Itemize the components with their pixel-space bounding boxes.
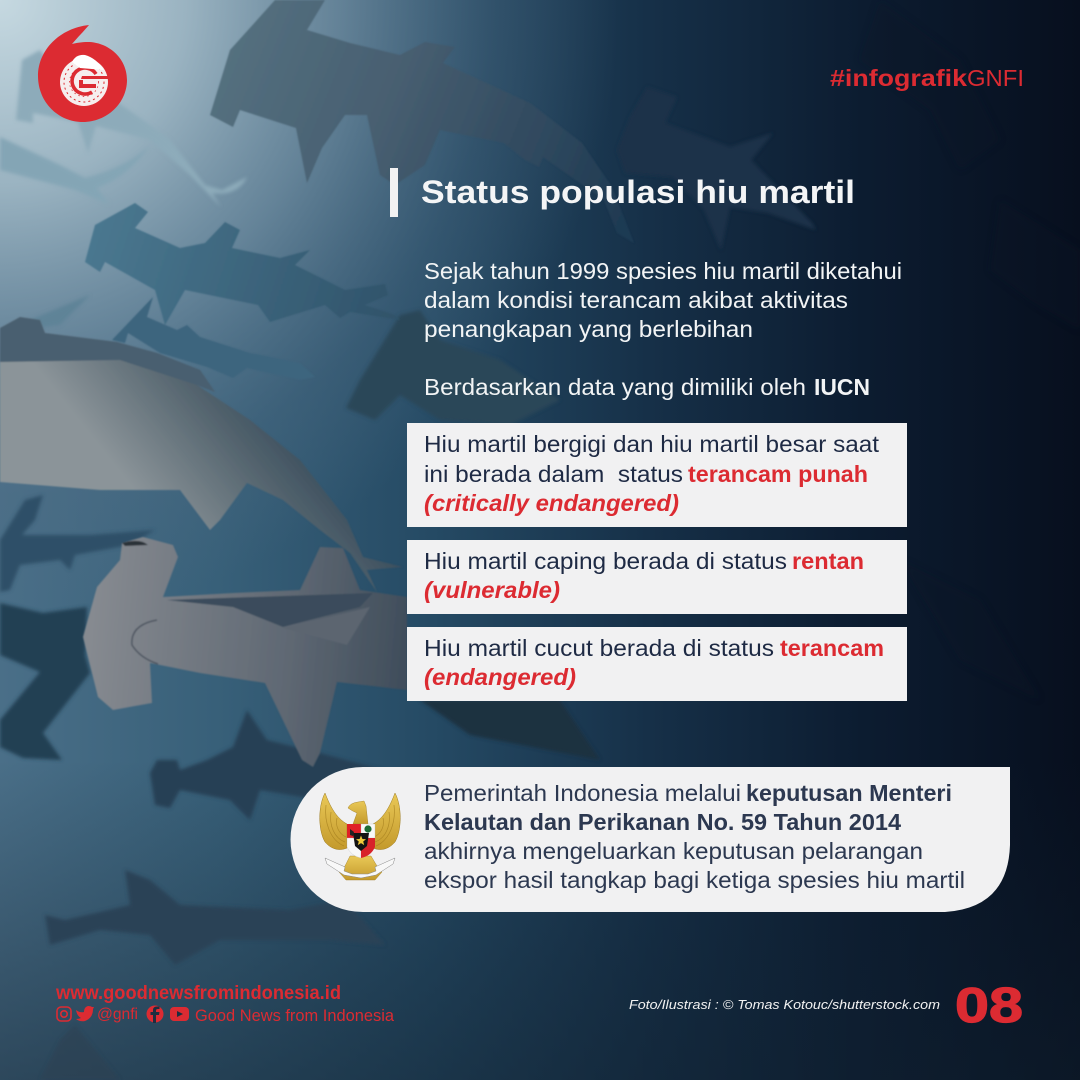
panel: critically endangered xyxy=(407,423,907,527)
decree text: keputusan Menteri xyxy=(746,780,952,806)
intro text: dalam kondisi terancam akibat aktivitas xyxy=(424,287,848,313)
panel: government decree xyxy=(290,767,1010,912)
panel: critically endangered: ini berada dalam status xyxy=(424,461,683,487)
intro text: Sejak tahun 1999 spesies hiu martil diketahui xyxy=(424,258,902,284)
panel: critically endangered: Hiu martil bergigi dan hiu martil besar saat xyxy=(424,431,880,457)
shark: third row xyxy=(112,297,315,380)
footer: website and social media: @gnfi xyxy=(97,1006,138,1023)
icon: Garuda Pancasila emblem xyxy=(320,793,400,880)
footer: website and social media: Good News from Indonesia xyxy=(195,1006,395,1025)
heading: status populasi xyxy=(390,168,855,217)
panel: endangered: Hiu martil cucut berada di status xyxy=(424,635,774,661)
decree text: akhirnya mengeluarkan keputusan pelarangan xyxy=(424,838,923,864)
footer: website and social media xyxy=(55,983,395,1025)
icon: twitter xyxy=(76,1006,94,1021)
icon: youtube xyxy=(170,1007,189,1021)
icon: facebook xyxy=(146,1006,164,1023)
hashtag: #infografik xyxy=(830,65,967,91)
hashtag xyxy=(830,65,1024,91)
panel: vulnerable xyxy=(407,540,907,614)
panel: endangered: terancam xyxy=(780,635,884,661)
intro text xyxy=(424,258,902,342)
panel: vulnerable: Hiu martil caping berada di status xyxy=(424,548,787,574)
shark: large grey left xyxy=(0,317,403,592)
decree text: Pemerintah Indonesia melalui xyxy=(424,780,741,806)
panel: endangered: (endangered) xyxy=(424,664,576,690)
IUCN source line: IUCN xyxy=(814,374,870,400)
panel: vulnerable: (vulnerable) xyxy=(424,577,560,603)
hashtag: GNFI xyxy=(967,65,1024,91)
photo credit: Foto/Ilustrasi : © Tomas Kotouc/shutterstock.com xyxy=(629,997,940,1012)
heading: status populasi: Status populasi hiu martil xyxy=(421,174,855,210)
panel: critically endangered: (critically endangered) xyxy=(424,490,679,516)
intro text: penangkapan yang berlebihan xyxy=(424,316,753,342)
panel: endangered xyxy=(407,627,907,701)
shark: top, dark-blue xyxy=(210,0,634,243)
logo: GNFI red circle emblem xyxy=(38,25,127,122)
IUCN source line: Berdasarkan data yang dimiliki oleh xyxy=(424,374,806,400)
page number: 08 xyxy=(955,979,1023,1033)
faint sharks far behind xyxy=(16,50,247,207)
panel: critically endangered: terancam punah xyxy=(688,461,868,487)
decree text: ekspor hasil tangkap bagi ketiga spesies hiu martil xyxy=(424,867,965,893)
panel: vulnerable: rentan xyxy=(792,548,864,574)
decree text: Kelautan dan Perikanan No. 59 Tahun 2014 xyxy=(424,809,901,835)
shark: second row xyxy=(85,203,400,325)
footer: website and social media: www.goodnewsfromindonesia.id xyxy=(55,983,341,1004)
icon: instagram xyxy=(57,1007,71,1021)
shark: main foreground hammerhead xyxy=(83,537,407,767)
decree text xyxy=(424,780,965,893)
